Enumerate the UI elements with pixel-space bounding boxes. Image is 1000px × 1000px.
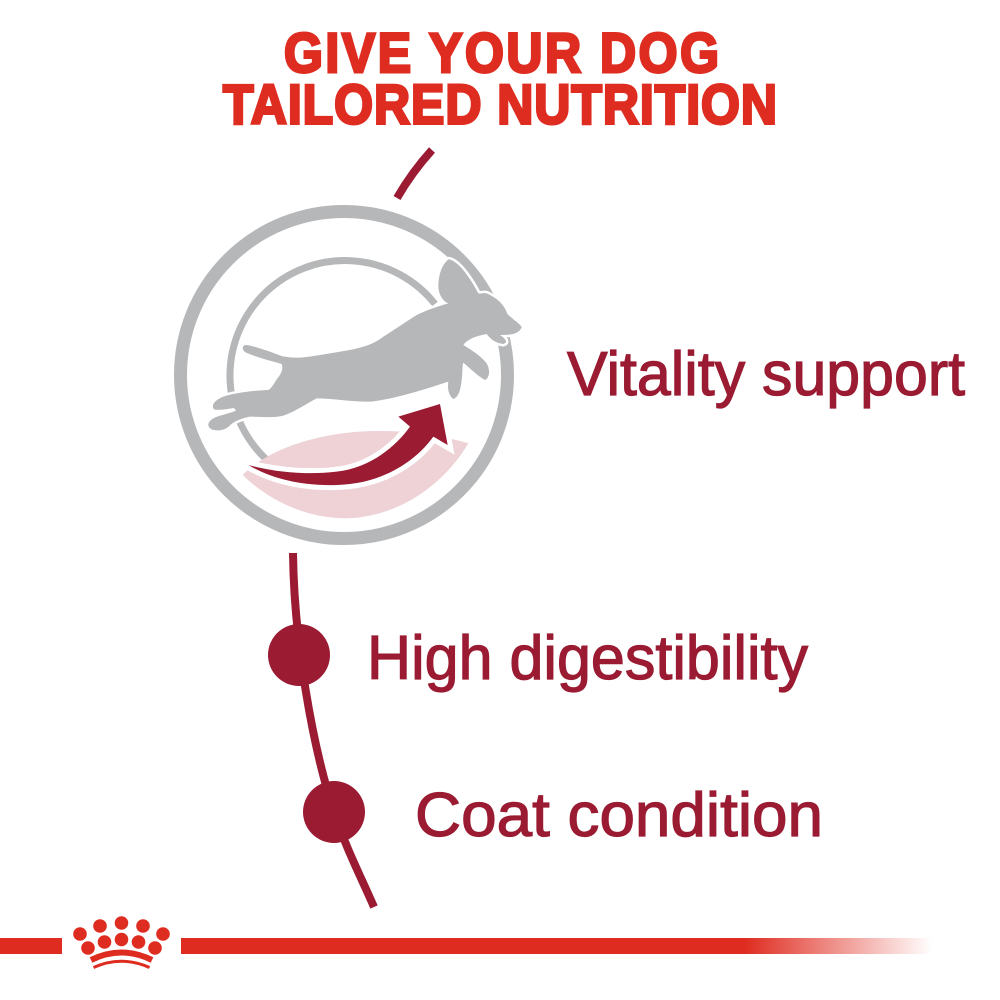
dog silhouette <box>208 259 522 430</box>
label: vitality support: Vitality support <box>567 340 965 409</box>
marker dot: coat condition <box>303 781 365 843</box>
connector line: lower curve <box>293 553 374 907</box>
icon: royal crown logo <box>73 916 170 968</box>
icon: vitality circle with leaping dog <box>180 212 522 538</box>
outer ring <box>180 212 508 538</box>
footer bar: left segment <box>0 938 62 954</box>
connector line: top segment <box>397 150 432 198</box>
title <box>223 22 777 136</box>
marker dot: high digestibility <box>268 624 330 686</box>
inner ring <box>230 261 435 461</box>
title: TAILORED NUTRITION <box>223 74 777 136</box>
label: high digestibility: High digestibility <box>367 624 808 693</box>
label: coat condition: Coat condition <box>415 781 823 850</box>
pink cushion <box>243 431 468 518</box>
rising arrow <box>248 404 448 485</box>
title: GIVE YOUR DOG <box>284 22 719 85</box>
footer bar: right fading segment <box>181 938 932 954</box>
